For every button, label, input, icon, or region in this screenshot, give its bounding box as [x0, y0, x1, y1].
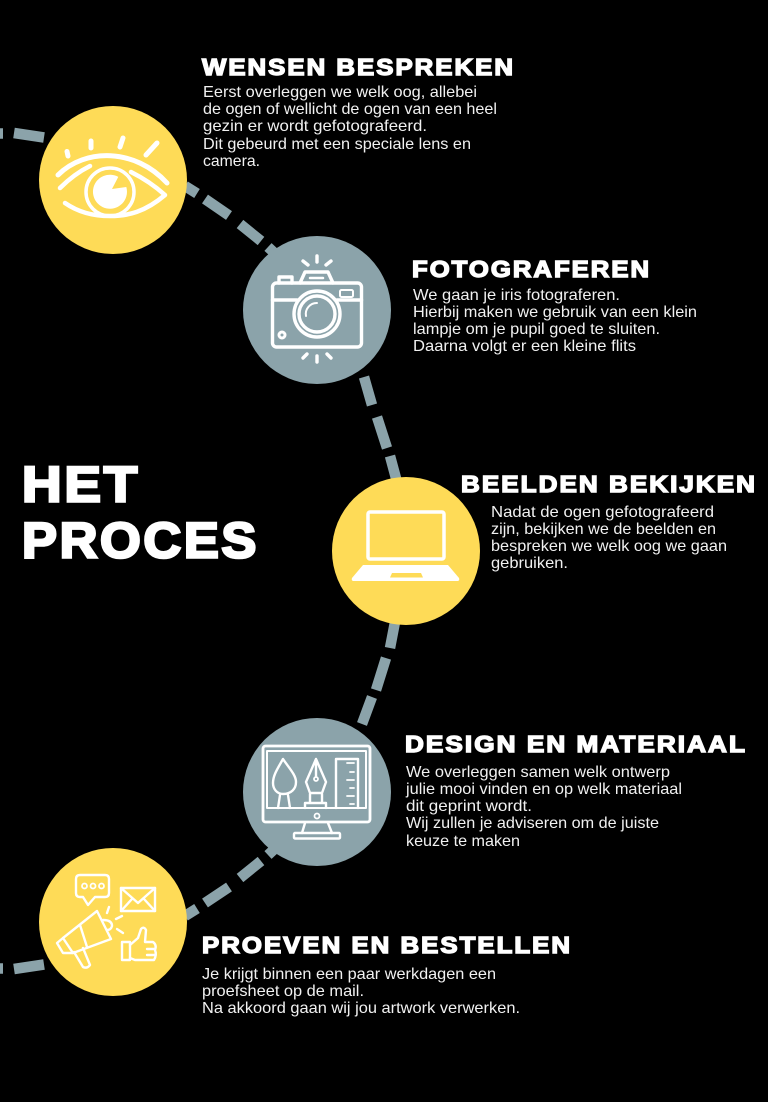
text block: step 3: bespreken we welk oog we gaan — [491, 538, 727, 555]
text block: step 3: gebruiken. — [491, 555, 568, 572]
circle: step 3 — [332, 477, 480, 625]
step 4: design en materiaal — [243, 718, 747, 866]
text block: step 3: zijn, bekijken we de beelden en — [491, 521, 716, 538]
text block: step 4: julie mooi vinden en op welk materiaal — [405, 781, 682, 798]
heading: design en materiaal: DESIGN EN MATERIAAL — [405, 731, 747, 757]
text block: step 4: dit geprint wordt. — [406, 798, 532, 815]
text block: step 2 — [413, 287, 697, 355]
title: PROCES — [22, 512, 259, 568]
text block: step 3: Nadat de ogen gefotografeerd — [491, 504, 714, 521]
circle: step 1 — [39, 106, 187, 254]
text block: step 5: proefsheet op de mail. — [202, 983, 364, 1000]
text block: step 4 — [405, 764, 682, 850]
heading: proeven en bestellen: PROEVEN EN BESTELLEN — [202, 932, 572, 958]
text block: step 1: Dit gebeurd met een speciale lens en — [203, 136, 471, 153]
icon: laptop — [352, 512, 459, 581]
text block: step 2: Daarna volgt er een kleine flits — [413, 338, 636, 355]
text block: step 5 — [202, 966, 520, 1017]
text block: step 4: We overleggen samen welk ontwerp — [406, 764, 670, 781]
step 5: proeven en bestellen — [39, 848, 572, 1017]
text block: step 4: Wij zullen je adviseren om de juiste — [406, 815, 659, 832]
text block: step 1: de ogen of wellicht de ogen van een heel — [203, 101, 497, 118]
text block: step 1: gezin er wordt gefotografeerd. — [203, 118, 427, 135]
title — [22, 456, 259, 568]
text block: step 1: camera. — [203, 153, 260, 170]
text block: step 5: Je krijgt binnen een paar werkdagen een — [202, 966, 496, 983]
text block: step 4: keuze te maken — [406, 833, 520, 850]
text block: step 1: Eerst overleggen we welk oog, allebei — [203, 84, 477, 101]
icon: marketing set — [57, 875, 156, 968]
text block: step 3 — [491, 504, 727, 572]
circle: step 5 — [39, 848, 187, 996]
heading: beelden bekijken: BEELDEN BEKIJKEN — [461, 471, 757, 497]
text block: step 2: We gaan je iris fotograferen. — [413, 287, 620, 304]
step 3: beelden bekijken — [332, 471, 757, 625]
icon: monitor with design tools — [263, 746, 370, 838]
icon: eye — [58, 138, 167, 216]
text block: step 1 — [203, 84, 497, 170]
title: HET — [22, 456, 140, 512]
heading: wensen bespreken: WENSEN BESPREKEN — [202, 54, 515, 80]
circle: step 4 — [243, 718, 391, 866]
text block: step 2: Hierbij maken we gebruik van een klein — [413, 304, 697, 321]
text block: step 2: lampje om je pupil goed te sluiten. — [413, 321, 660, 338]
text block: step 5: Na akkoord gaan wij jou artwork verwerken. — [202, 1000, 520, 1017]
step 2: fotograferen — [243, 236, 697, 384]
dashed arc connector — [0, 133, 397, 969]
heading: fotograferen: FOTOGRAFEREN — [412, 256, 651, 282]
icon: camera — [272, 256, 362, 362]
step 1: wensen bespreken — [39, 54, 515, 254]
circle: step 2 — [243, 236, 391, 384]
